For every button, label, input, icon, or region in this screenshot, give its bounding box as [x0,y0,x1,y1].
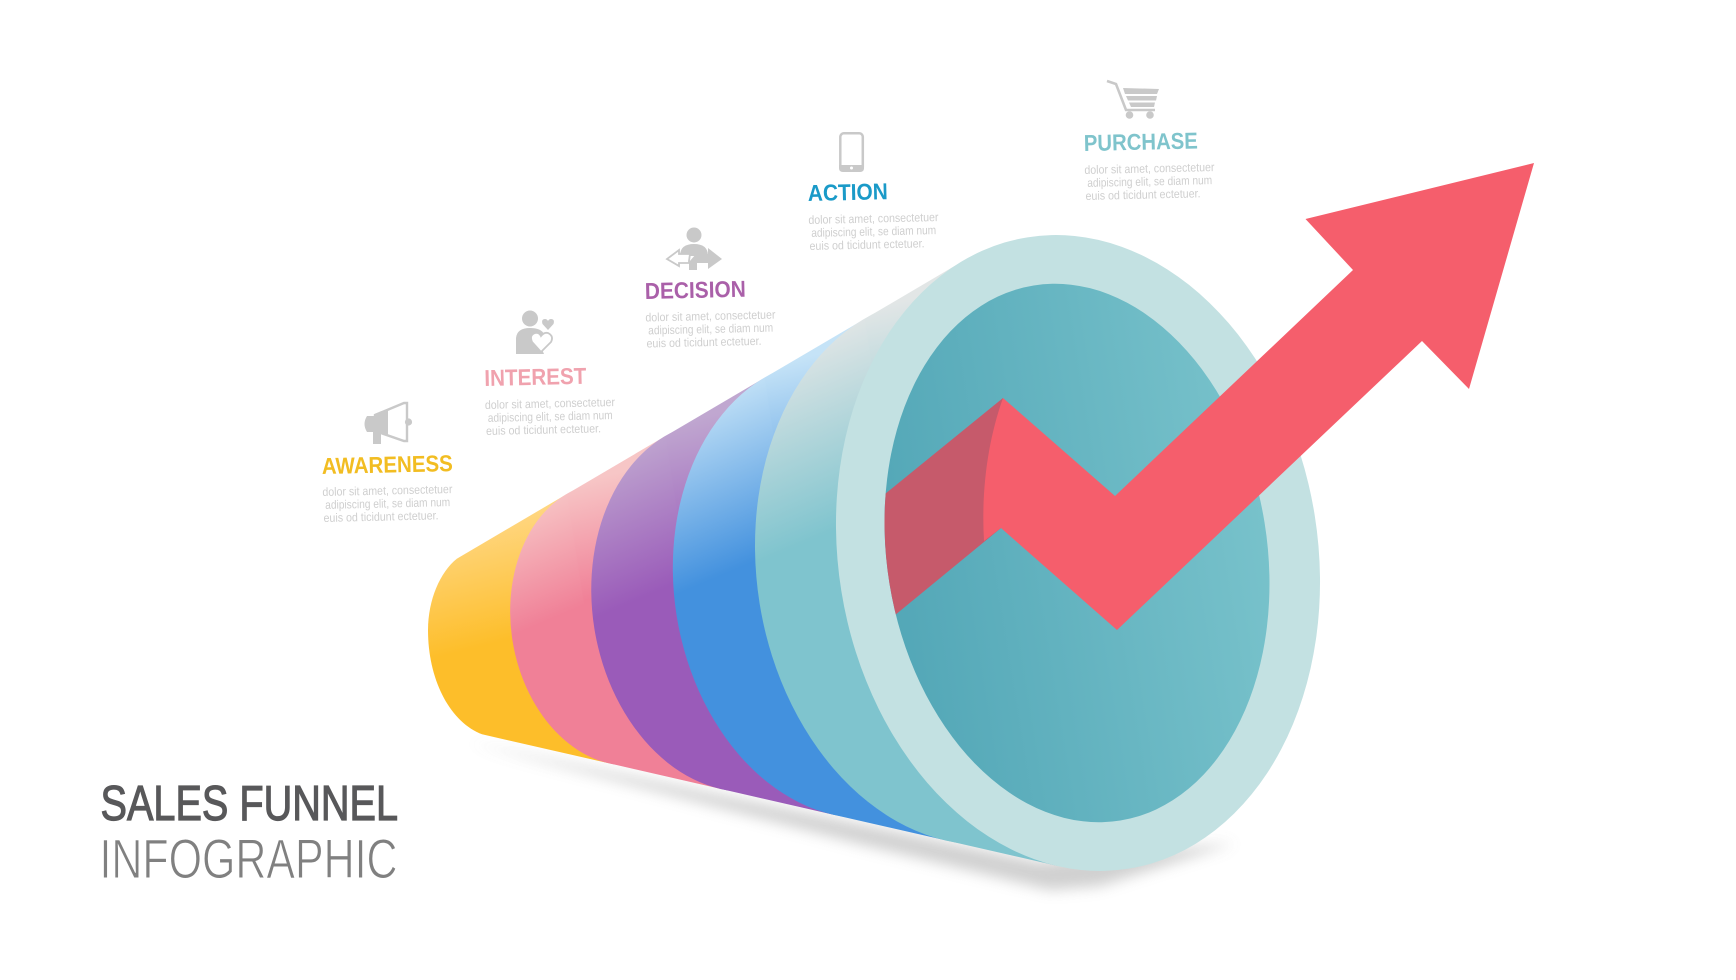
label and description: euis od ticidunt ectetuer. [486,421,601,438]
band: interest pink [490,436,746,789]
step: action [808,133,939,253]
label and description: dolor sit amet, consectetuer [485,395,615,412]
label and description: AWARENESS [322,450,453,479]
label and description [322,450,454,525]
funnel mouth outer ring [791,199,1365,907]
title [100,777,398,890]
band: awareness yellow [428,494,609,763]
label and description: dolor sit amet, consectetuer [322,482,453,499]
title: INFOGRAPHIC [100,827,398,890]
step: interest [484,310,616,438]
icon: smartphone [839,133,864,172]
funnel: 3D cone with five bands [428,199,1365,907]
label and description: adipiscing elit, se diam num [488,408,613,425]
icon: person at crossroads [667,228,722,270]
band: purchase teal [716,261,1211,876]
label and description: euis od ticidunt ectetuer. [646,334,762,350]
icon: shopping cart [1107,81,1159,119]
label and description: ACTION [808,178,888,206]
title: SALES FUNNEL [100,777,398,831]
label and description [484,362,616,438]
arrow tail inside funnel (shaded) [884,398,1003,614]
label and description: DECISION [645,276,746,304]
label and description: dolor sit amet, consectetuer [1084,160,1215,177]
label and description: euis od ticidunt ectetuer. [1085,186,1201,203]
label and description [808,177,939,253]
label and description: euis od ticidunt ectetuer. [323,508,439,525]
funnel shadow [468,742,1235,890]
step: awareness [322,403,454,525]
label and description: adipiscing elit, se diam num [648,321,773,337]
icon: person with heart [516,310,554,354]
label and description: adipiscing elit, se diam num [1087,173,1212,190]
icon: megaphone [364,403,412,444]
label and description: INTEREST [484,363,587,391]
step: purchase [1084,81,1215,203]
label and description: adipiscing elit, se diam num [811,223,936,240]
label and description: euis od ticidunt ectetuer. [809,236,925,253]
label and description: dolor sit amet, consectetuer [808,210,939,227]
label and description: PURCHASE [1084,127,1198,156]
label and description [645,275,776,350]
label and description: adipiscing elit, se diam num [325,495,450,512]
step: decision [645,228,776,350]
arrow body and head [983,163,1534,630]
band: decision purple [565,378,900,815]
arrow: rising red zigzag [884,132,1534,630]
funnel mouth inner opening [846,255,1308,851]
label and description [1084,127,1215,203]
band: action blue [640,319,1055,844]
label and description: dolor sit amet, consectetuer [645,308,776,324]
